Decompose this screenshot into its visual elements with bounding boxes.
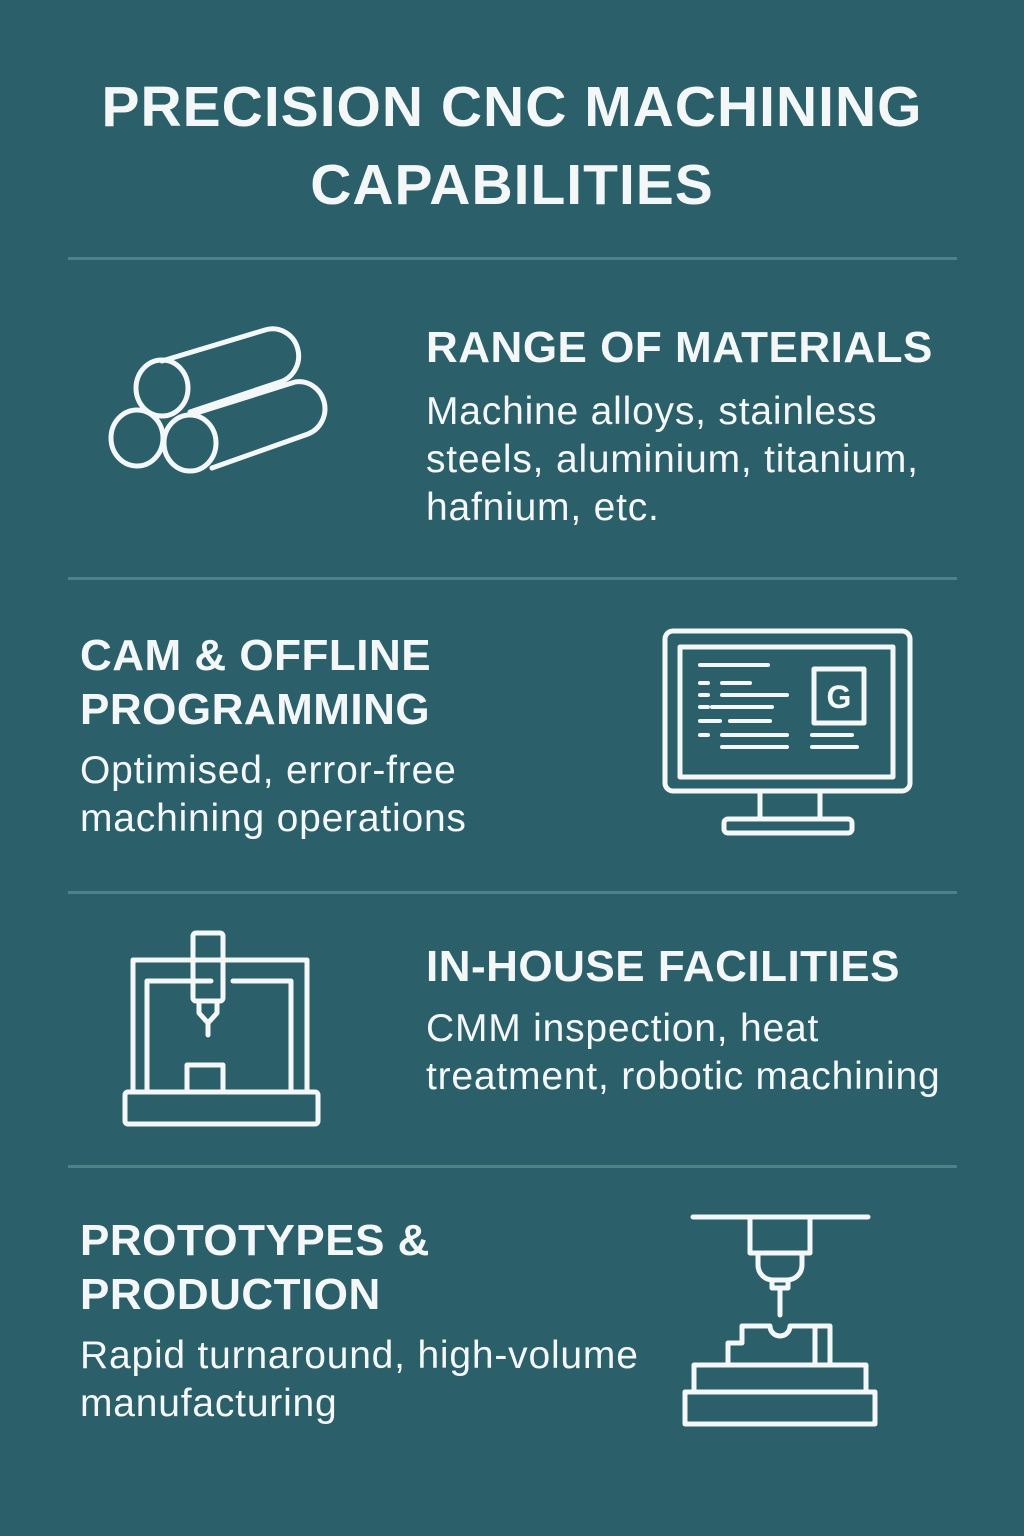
section: in-house facilities: IN-HOUSE FACILITIES [426,942,900,991]
section: in-house facilities [426,942,940,1098]
section: in-house facilities: treatment, robotic machining [426,1055,940,1098]
icon: gantry machine [122,930,320,1126]
section: range of materials: steels, aluminium, titanium, [426,438,919,481]
title: CAPABILITIES [310,153,714,217]
section: prototypes & production: PROTOTYPES & [80,1216,430,1265]
section: range of materials: RANGE OF MATERIALS [426,323,933,372]
title: PRECISION CNC MACHINING [101,75,923,139]
section: prototypes & production: PRODUCTION [80,1270,381,1319]
section: prototypes & production: Rapid turnaround, high-volume [80,1334,639,1377]
icon: monitor [662,628,912,836]
section: CAM & offline programming: machining operations [80,797,467,840]
section: in-house facilities: CMM inspection, heat [426,1007,819,1050]
section: range of materials: Machine alloys, stainless [426,390,877,433]
icon: cylinders [108,326,328,474]
icon: milling spindle [682,1214,878,1426]
section: CAM & offline programming: Optimised, error-free [80,749,457,792]
section: range of materials [426,323,933,529]
icon: monitor: G [827,679,851,715]
section: range of materials: hafnium, etc. [426,486,660,529]
title [101,75,923,217]
section: prototypes & production: manufacturing [80,1382,338,1425]
section: CAM & offline programming: CAM & OFFLINE [80,631,431,680]
section: CAM & offline programming [80,631,467,840]
section: prototypes & production [80,1216,639,1425]
section: CAM & offline programming: PROGRAMMING [80,685,430,734]
